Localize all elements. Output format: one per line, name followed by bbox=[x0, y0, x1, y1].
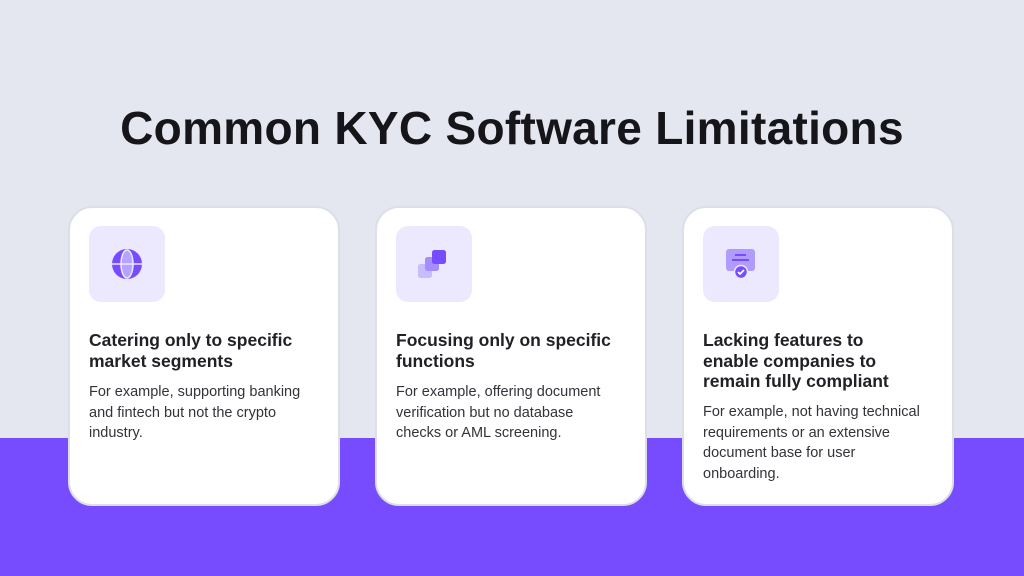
panel: specific functions bbox=[375, 206, 647, 506]
text: For example, offering document bbox=[396, 384, 600, 400]
text bbox=[703, 404, 920, 482]
panel: market segments bbox=[68, 206, 340, 506]
text: document base for user bbox=[703, 445, 855, 461]
text: requirements or an extensive bbox=[703, 424, 890, 440]
text bbox=[396, 384, 600, 441]
text bbox=[89, 384, 300, 441]
text: onboarding. bbox=[703, 466, 780, 482]
text: For example, not having technical bbox=[703, 404, 920, 420]
text: verification but no database bbox=[396, 404, 573, 420]
icon: certificate bbox=[703, 226, 779, 302]
heading: enable companies to bbox=[703, 350, 876, 370]
heading: Lacking features to bbox=[703, 330, 863, 350]
heading: Focusing only on specific functions bbox=[396, 330, 611, 370]
icon: globe bbox=[89, 226, 165, 302]
icon: stacked squares bbox=[396, 226, 472, 302]
purple band bbox=[0, 438, 1024, 576]
heading bbox=[703, 330, 889, 391]
heading: remain fully compliant bbox=[703, 371, 889, 391]
text: For example, supporting banking bbox=[89, 384, 300, 400]
heading: Catering only to specific market segments bbox=[89, 330, 292, 370]
text: and fintech but not the crypto bbox=[89, 404, 276, 420]
text: industry. bbox=[89, 425, 143, 441]
title: Common KYC Software Limitations bbox=[120, 102, 904, 154]
text: checks or AML screening. bbox=[396, 425, 561, 441]
panel: compliance bbox=[682, 206, 954, 506]
